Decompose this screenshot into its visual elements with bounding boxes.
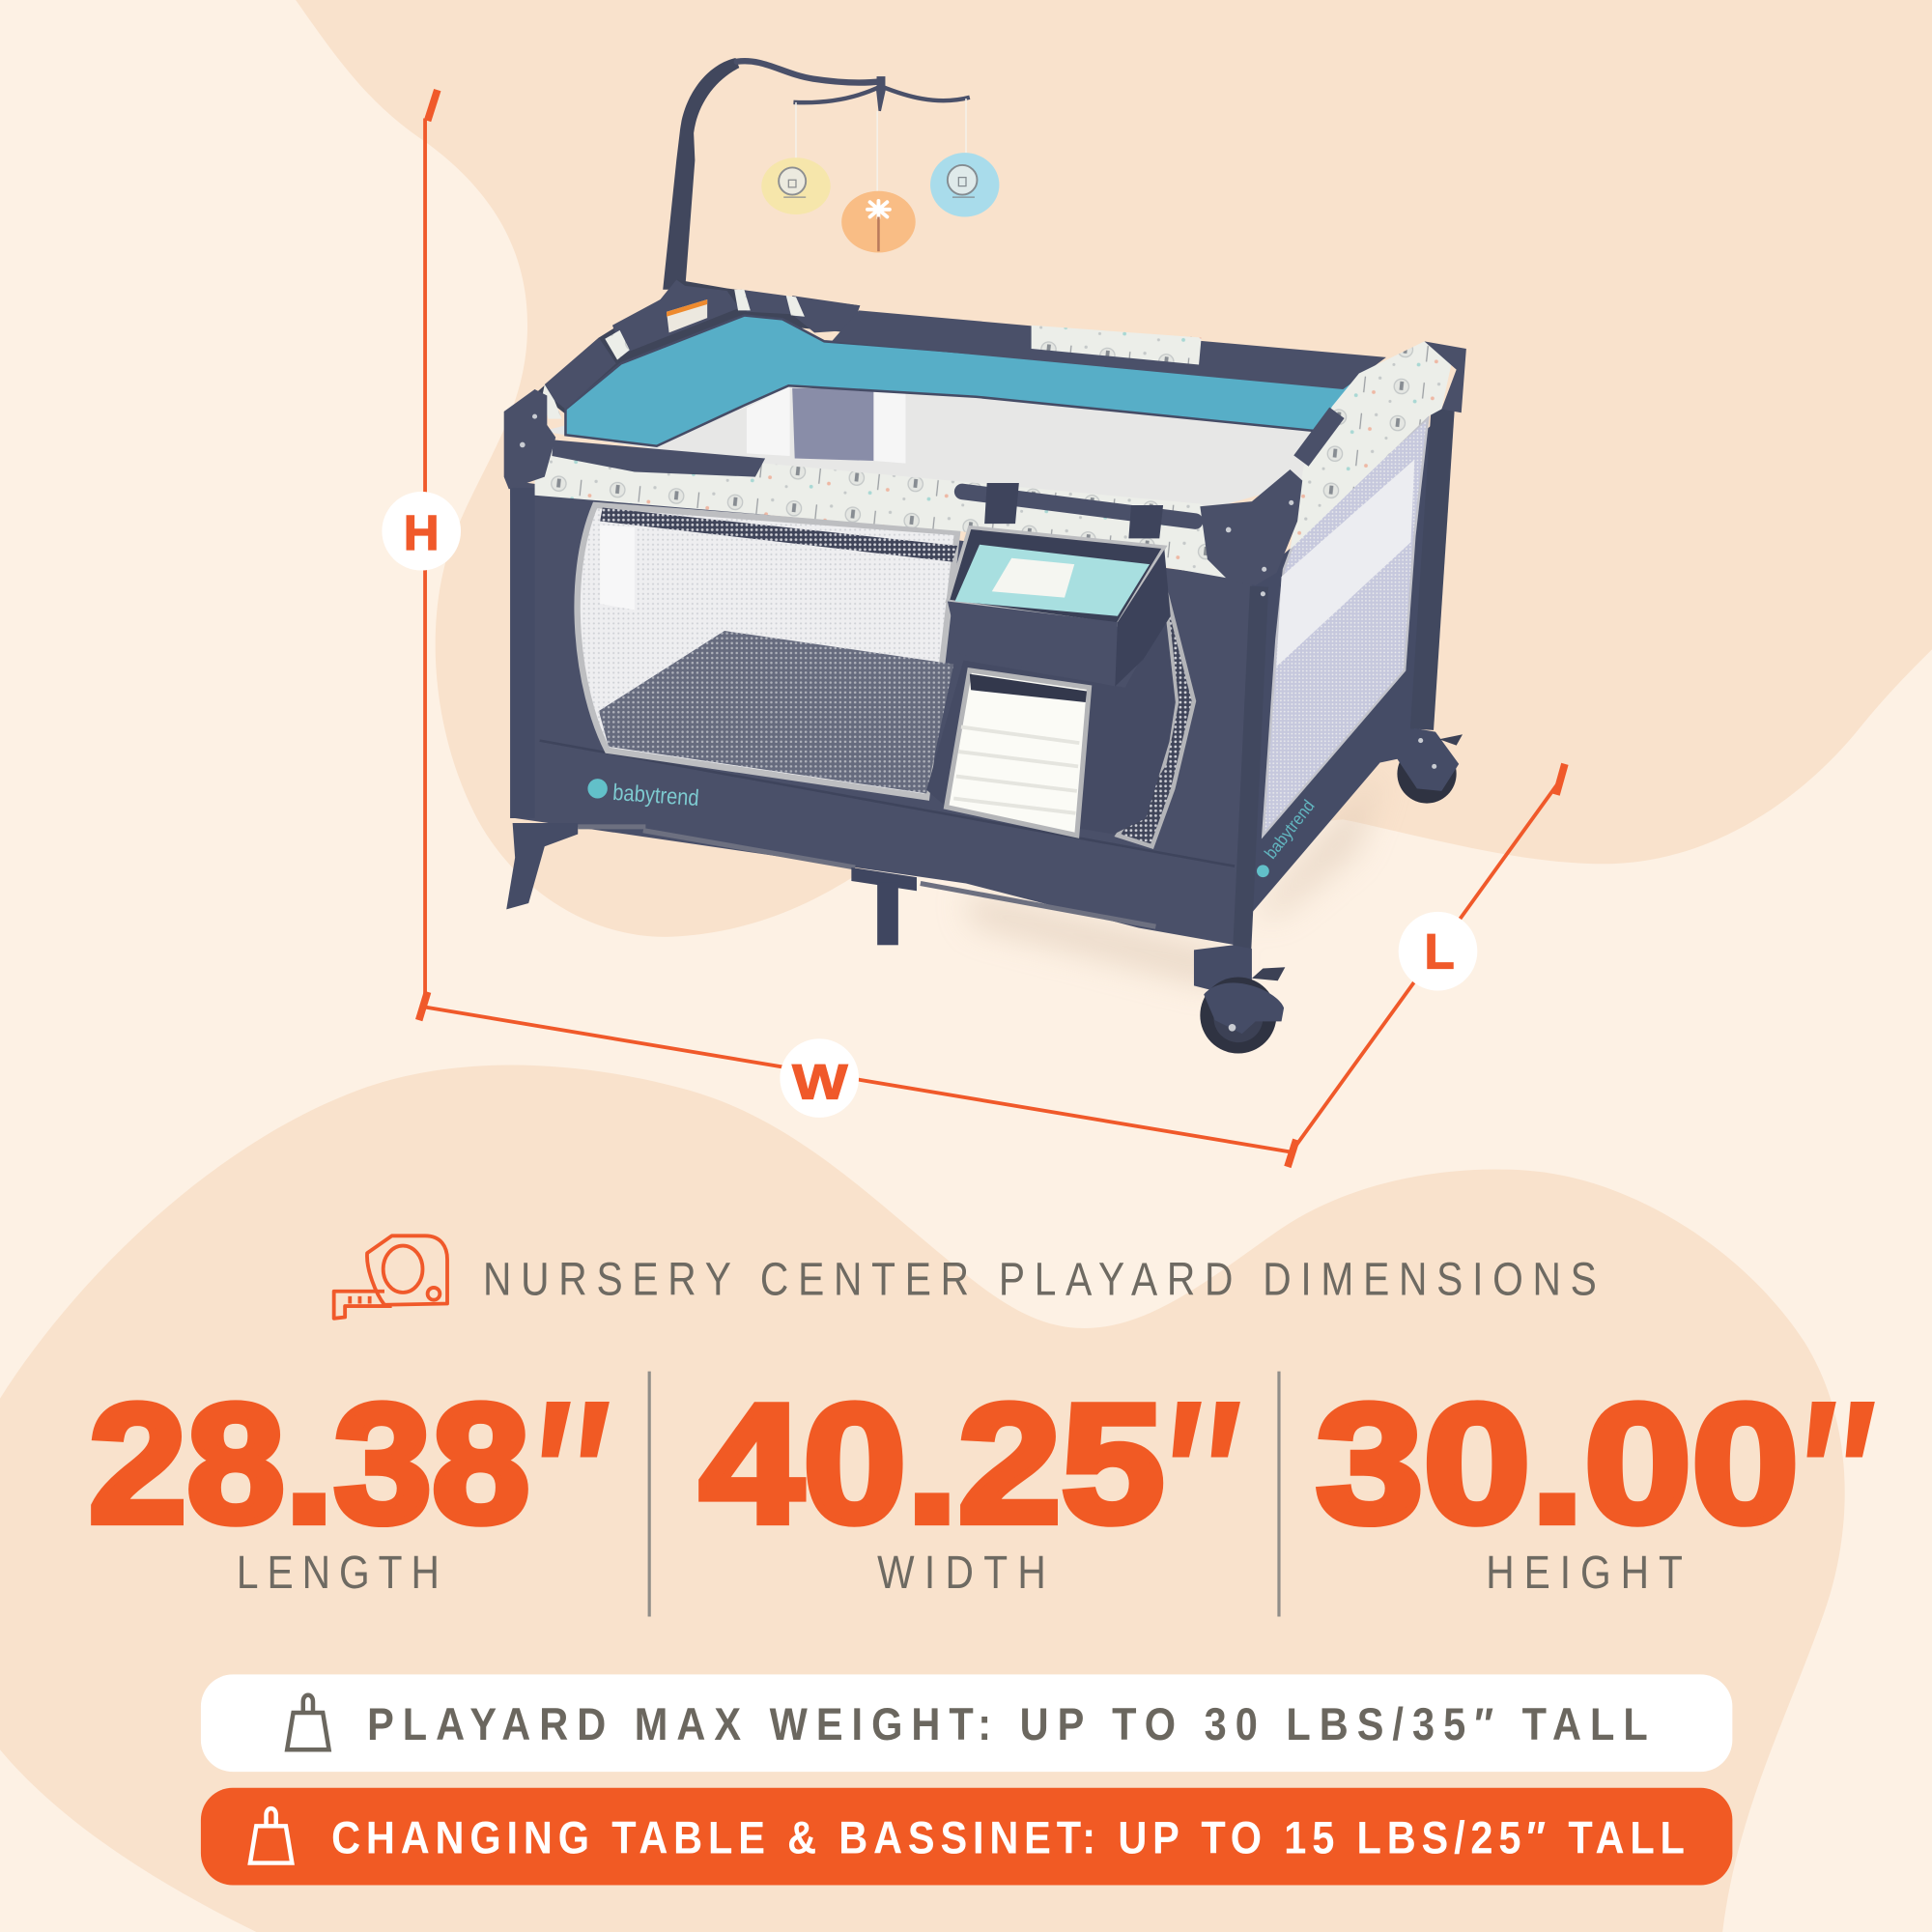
front mesh window [578,505,957,797]
floor shadow [966,764,1386,985]
rail print bits [542,290,805,419]
playard product illustration [504,58,1466,1054]
warning label [667,299,707,332]
top background blob [296,0,1932,937]
rail backing [537,280,860,414]
height value: 30.00 [1316,1370,1799,1558]
back mesh white stripes [747,385,906,464]
front left pole [513,488,532,818]
side logo: babytrend [1261,796,1319,863]
left foot [506,823,578,909]
L badge: L [1424,924,1455,980]
mesh top band [600,508,957,562]
front panel [510,480,1254,945]
front print strip [535,441,1247,582]
divider [1278,1372,1280,1616]
width dimension line [423,1007,1296,1167]
mobile toy: yellow lion [761,157,831,214]
front right corner [1200,469,1302,585]
front right pole [1242,586,1260,950]
W badge: W [792,1055,849,1110]
mobile toy: blue lion [930,153,999,216]
length label: LENGTH [237,1547,440,1599]
mobile arm [663,58,881,290]
white mesh reflection [600,525,635,610]
changing table text: CHANGING TABLE & BASSINET: UP TO 15 LBS/25″ TALL [331,1813,1685,1863]
under rail [578,827,1155,926]
side mesh light window [1276,460,1414,667]
warning label stripe [667,299,707,317]
right short rail [1301,412,1337,461]
mobile crossbar [793,76,970,191]
changing table pill [201,1788,1732,1886]
width value: ″ [1166,1354,1243,1600]
side panel [1234,415,1443,945]
H badge [382,492,461,571]
back rail print patch [1032,326,1202,365]
rear right caster [1380,728,1463,804]
width label: WIDTH [877,1547,1046,1599]
upper organizer pocket [948,527,1171,686]
length dimension line [1292,764,1565,1152]
dark mesh floor [599,631,953,793]
back rail [832,310,1386,389]
L badge [1399,912,1477,991]
playard weight pill [201,1674,1732,1772]
back right corner [1424,341,1466,412]
divider [648,1372,650,1616]
height dimension line [419,90,438,1020]
height value: ″ [1801,1354,1878,1600]
left top rail segments [545,280,860,409]
front right caster [1194,945,1285,1054]
teal inner wall [565,316,1355,446]
height value [1316,1354,1878,1600]
length value: ″ [535,1354,612,1600]
length value: 28.38 [89,1370,529,1558]
side print strip [1290,341,1454,550]
corner mesh column [792,388,873,461]
mobile toy: orange palm [841,191,916,252]
width value [699,1354,1243,1600]
playard weight text: PLAYARD MAX WEIGHT: UP TO 30 LBS/35″ TALL [367,1700,1648,1750]
rear right pole [1422,409,1443,729]
organizer handle [962,483,1195,538]
H badge: H [404,505,440,560]
babytrend logo [587,779,699,810]
side logo [1257,796,1319,877]
height label: HEIGHT [1486,1547,1683,1599]
bottom background blob [0,1065,1845,1932]
icon: tape measure [334,1236,447,1319]
length value [89,1354,612,1600]
front left corner [504,389,555,489]
front panel seam [540,741,1235,867]
icon: weight [250,1808,292,1863]
W badge [780,1038,859,1118]
lower organizer pocket [926,614,1176,835]
frame bolts [520,414,1293,596]
back mesh wall [542,370,1337,511]
side mesh [1263,417,1428,836]
babytrend logo: babytrend [612,780,699,810]
diapers window [947,670,1090,836]
organizer mesh edge [1118,581,1194,846]
icon: weight [287,1695,329,1749]
width value: 40.25 [699,1370,1164,1558]
left top handle rail [552,440,765,477]
center leg [851,867,917,945]
heading: NURSERY CENTER PLAYARD DIMENSIONS [483,1253,1597,1305]
